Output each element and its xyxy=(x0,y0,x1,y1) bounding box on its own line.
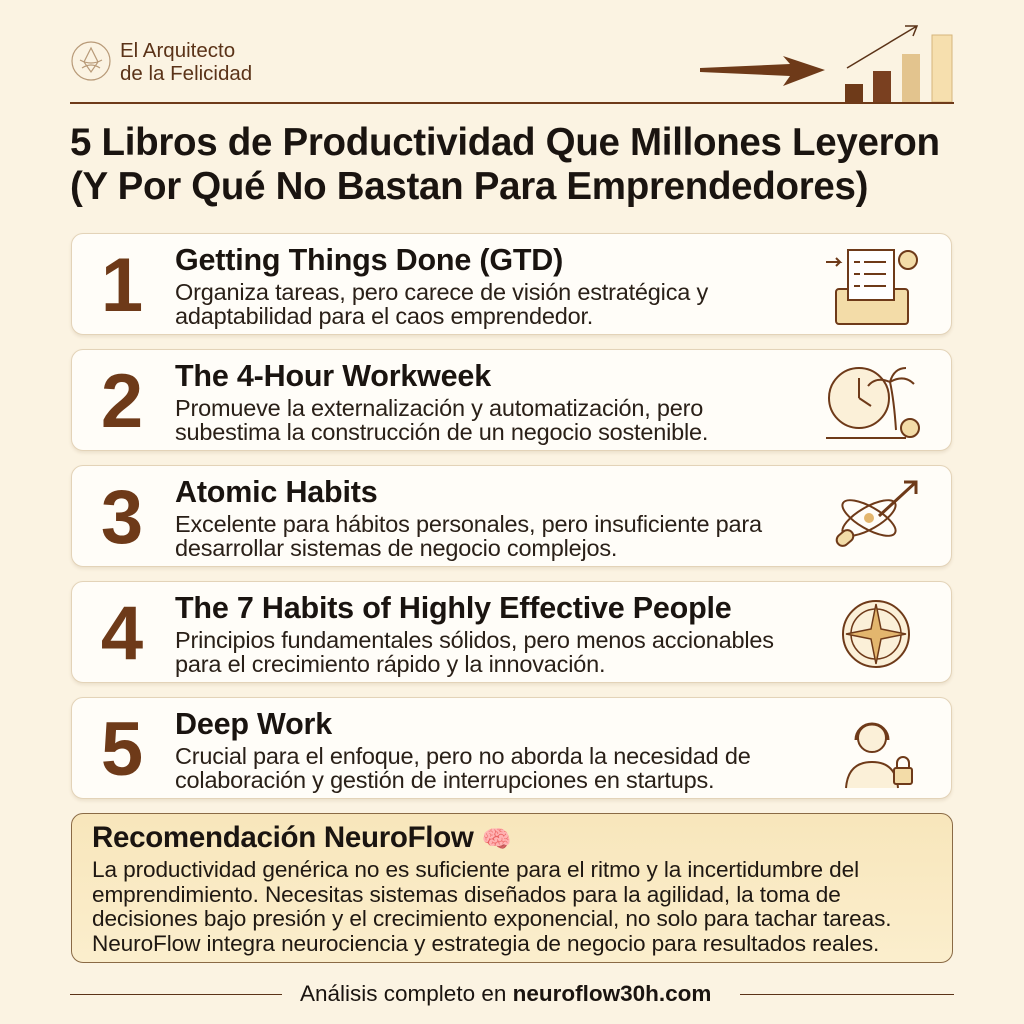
card 3: 3 xyxy=(101,475,143,560)
card 4: 4 xyxy=(101,591,143,676)
card 3: Excelente para hábitos personales, pero insuficiente para xyxy=(175,511,762,537)
header chart xyxy=(700,25,952,102)
card 4: para el crecimiento rápido y la innovación. xyxy=(175,651,605,677)
footer: Análisis completo en neuroflow30h.com xyxy=(300,981,711,1006)
title: 5 Libros de Productividad Que Millones Leyeron xyxy=(70,121,940,164)
card 3: desarrollar sistemas de negocio complejos. xyxy=(175,535,617,561)
card 1: 1 xyxy=(101,243,143,328)
text block xyxy=(92,857,891,956)
card 5: 5 xyxy=(101,707,143,792)
card 5: colaboración y gestión de interrupciones en startups. xyxy=(175,767,714,793)
card 3 xyxy=(71,465,952,567)
card 2: subestima la construcción de un negocio sostenible. xyxy=(175,419,708,445)
card 5 xyxy=(71,697,952,799)
title xyxy=(70,121,940,208)
card 2 xyxy=(71,349,952,451)
card 1 xyxy=(71,233,952,335)
icon: compass xyxy=(842,600,910,668)
card 4: The 7 Habits of Highly Effective People xyxy=(175,591,732,625)
icon: atom xyxy=(836,480,918,547)
text block: emprendimiento. Necesitas sistemas diseñados para la agilidad, la toma de xyxy=(92,882,841,906)
logo xyxy=(71,39,252,85)
icon: clock palm xyxy=(826,367,920,439)
title: (Y Por Qué No Bastan Para Emprendedores) xyxy=(70,165,868,208)
logo: de la Felicidad xyxy=(120,62,252,85)
card 2: 2 xyxy=(101,359,143,444)
card 5: Crucial para el enfoque, pero no aborda la necesidad de xyxy=(175,743,751,769)
panel: recommendation xyxy=(71,813,953,963)
card 5: Deep Work xyxy=(175,707,332,741)
heading: Recomendación NeuroFlow 🧠 xyxy=(92,821,511,854)
icon: person headphones xyxy=(845,722,913,788)
icon: inbox xyxy=(826,249,918,325)
card 1: adaptabilidad para el caos emprendedor. xyxy=(175,303,593,329)
card 4 xyxy=(71,581,952,683)
card 4: Principios fundamentales sólidos, pero menos accionables xyxy=(175,627,774,653)
card 3: Atomic Habits xyxy=(175,475,377,509)
card 1: Getting Things Done (GTD) xyxy=(175,243,563,277)
card 1: Organiza tareas, pero carece de visión estratégica y xyxy=(175,279,708,305)
text block: decisiones bajo presión y el crecimiento exponencial, no solo para tachar tareas. xyxy=(92,906,891,931)
text block: La productividad genérica no es suficiente para el ritmo y la incertidumbre del xyxy=(92,857,859,882)
card 2: The 4-Hour Workweek xyxy=(175,359,491,393)
card 2: Promueve la externalización y automatización, pero xyxy=(175,395,703,421)
logo: El Arquitecto xyxy=(120,39,235,62)
text block: NeuroFlow integra neurociencia y estrategia de negocio para resultados reales. xyxy=(92,930,879,956)
